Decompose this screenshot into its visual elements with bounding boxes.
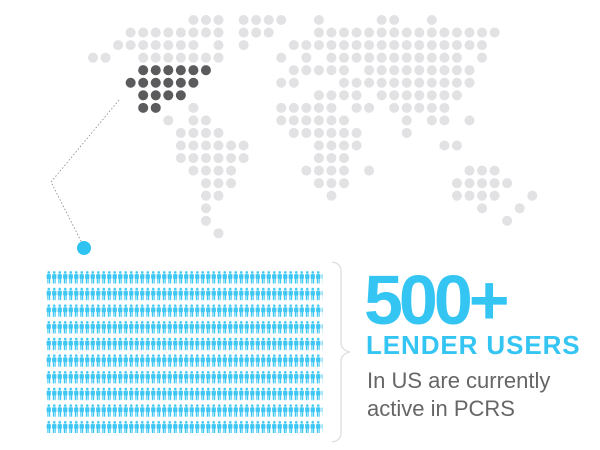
highlighted region: US [126,65,211,113]
dotted connector line [51,100,119,245]
description: active in PCRS [367,396,515,421]
people grid [46,271,322,433]
stat label: LENDER USERS [366,330,580,360]
description [367,368,550,421]
marker dot [77,241,91,255]
stat number: 500+ [364,261,506,339]
description: In US are currently [367,368,550,393]
brace [332,262,350,442]
map dots [88,15,537,238]
